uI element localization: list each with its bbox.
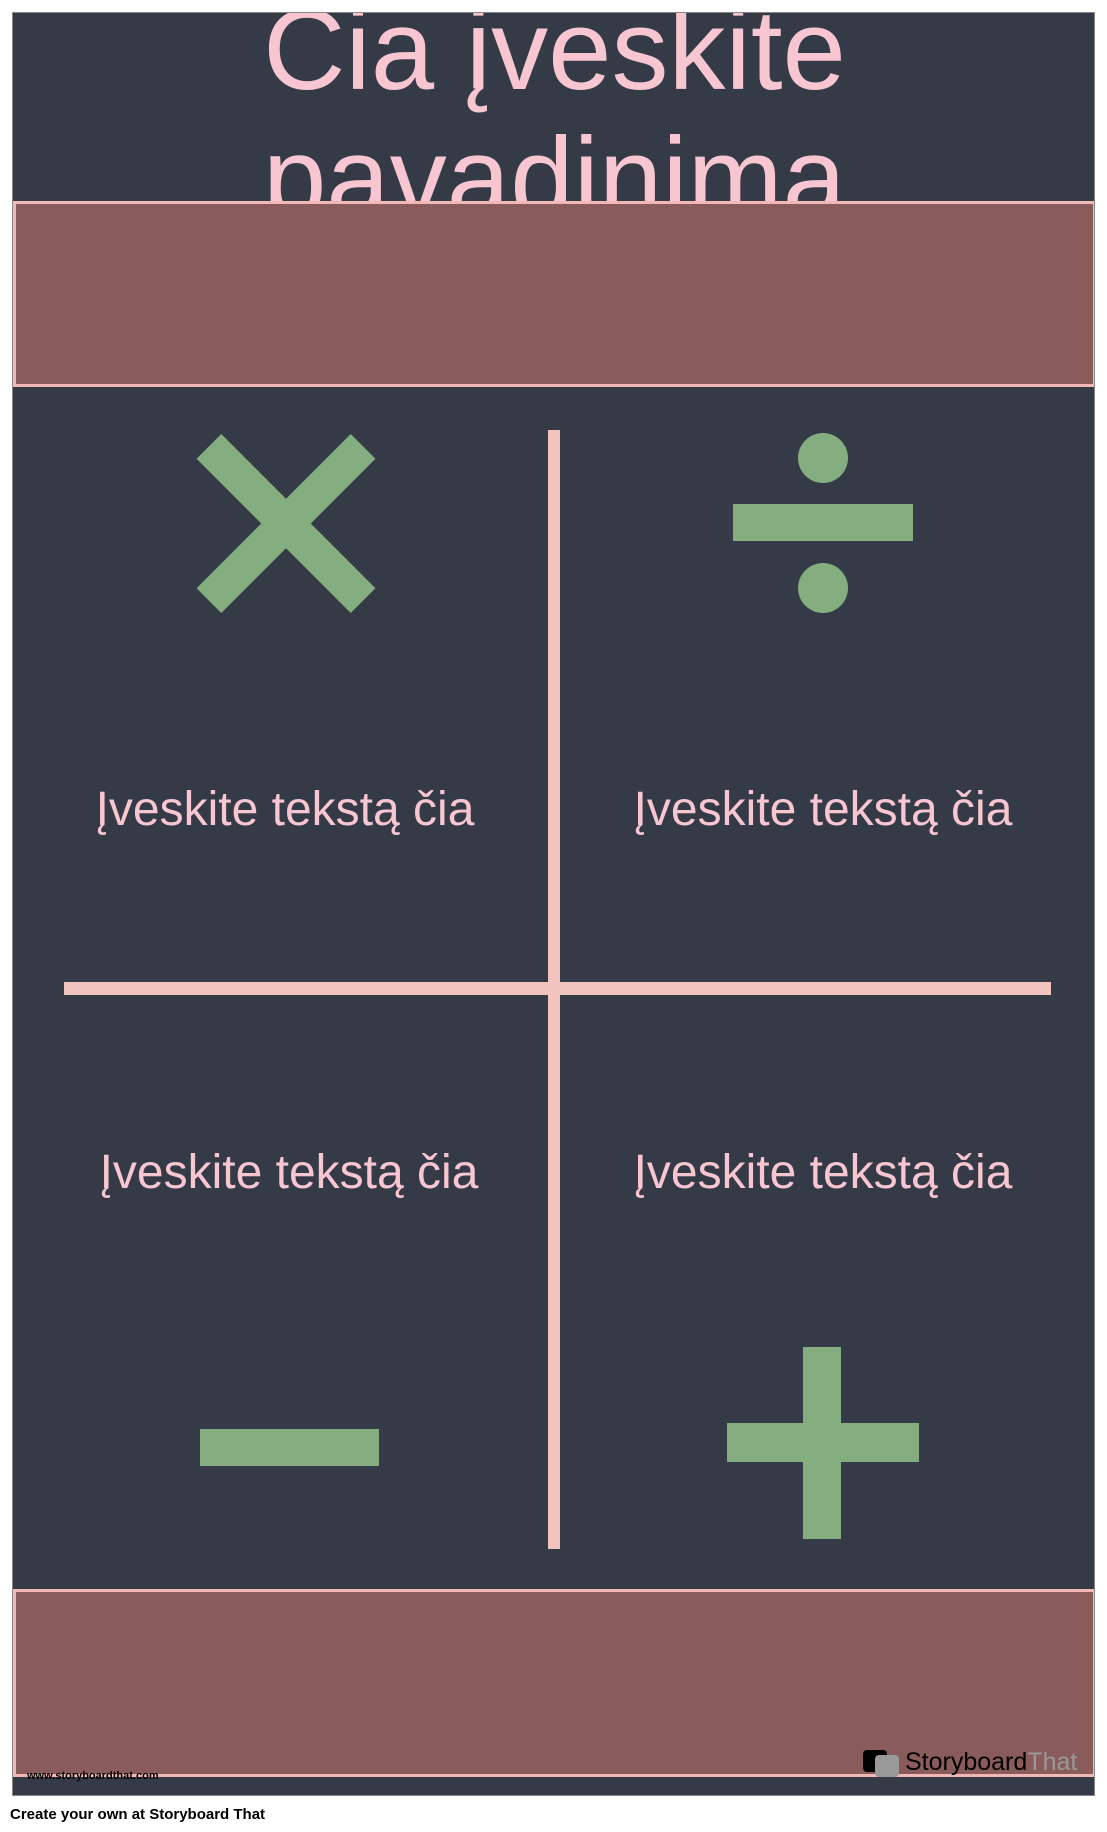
text: top left: Įveskite tekstą čia bbox=[96, 783, 474, 836]
vertical divider bbox=[548, 430, 560, 1549]
text: top right: Įveskite tekstą čia bbox=[634, 783, 1012, 836]
watermark url: www.storyboardthat.com bbox=[27, 1770, 159, 1782]
panel: top banner bbox=[13, 201, 1096, 387]
icon: plus bbox=[727, 1347, 919, 1539]
icon: divide bbox=[733, 433, 913, 613]
text: bottom left: Įveskite tekstą čia bbox=[100, 1146, 478, 1199]
panel: bottom banner bbox=[13, 1589, 1096, 1777]
footer text: Create your own at Storyboard That bbox=[10, 1806, 265, 1823]
logo: StoryboardThat bbox=[905, 1748, 1077, 1776]
icon: minus bbox=[200, 1429, 379, 1466]
text: bottom right: Įveskite tekstą čia bbox=[634, 1146, 1012, 1199]
horizontal divider bbox=[64, 982, 1051, 995]
icon: multiply bbox=[196, 434, 376, 613]
